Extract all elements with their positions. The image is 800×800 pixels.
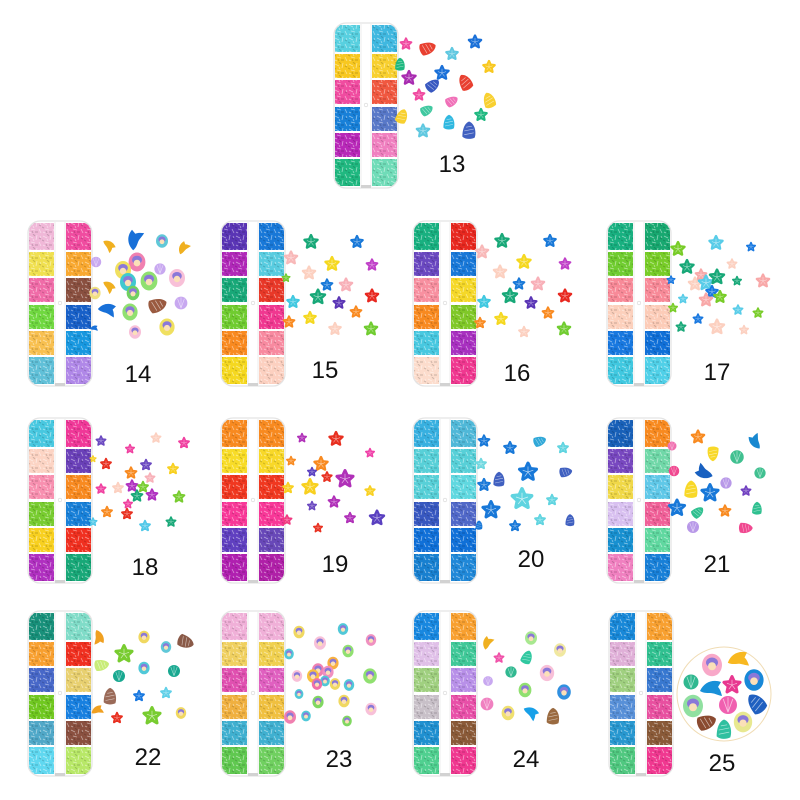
number label: 22 — [135, 744, 161, 771]
tray of twelve colour compartments — [333, 22, 399, 189]
panel: set 19 — [220, 417, 384, 584]
tray of twelve colour compartments — [608, 610, 674, 777]
number label: 20 — [518, 546, 544, 573]
tray of twelve colour compartments — [220, 417, 286, 584]
scattered pieces — [282, 432, 384, 532]
number label: 15 — [312, 357, 338, 384]
scattered pieces — [89, 229, 191, 339]
panel: set 14 — [27, 220, 191, 388]
tray of twelve colour compartments — [412, 417, 478, 584]
scattered pieces — [475, 234, 571, 336]
tray of twelve colour compartments — [220, 610, 286, 777]
panel: set 20 — [412, 417, 574, 584]
circular inset of close-up pieces — [677, 647, 771, 741]
panel: set 22 — [27, 610, 196, 777]
panel: set 23 — [220, 610, 377, 777]
scattered pieces — [668, 431, 766, 533]
panel: set 13 — [333, 22, 497, 189]
number label: 14 — [125, 361, 151, 388]
number label: 13 — [439, 151, 465, 178]
panel: set 24 — [412, 610, 571, 777]
scattered pieces — [394, 36, 497, 139]
panel: set 16 — [412, 220, 571, 387]
tray of twelve colour compartments — [27, 610, 93, 777]
panel: set 15 — [220, 220, 378, 387]
number label: 23 — [326, 746, 352, 773]
scattered pieces — [282, 235, 378, 334]
scattered pieces — [480, 631, 571, 724]
scattered pieces — [89, 433, 189, 530]
number label: 17 — [704, 359, 730, 386]
tray of twelve colour compartments — [412, 220, 478, 387]
number label: 19 — [322, 551, 348, 578]
scattered pieces — [667, 236, 769, 334]
tray of twelve colour compartments — [412, 610, 478, 777]
panel: set 17 — [606, 220, 769, 387]
panel: set 21 — [606, 417, 766, 584]
scattered pieces — [476, 434, 574, 530]
panel: set 18 — [27, 417, 189, 584]
number label: 16 — [504, 360, 530, 387]
scattered pieces — [284, 623, 377, 726]
number label: 25 — [709, 750, 735, 777]
number label: 24 — [513, 746, 539, 773]
tray of twelve colour compartments — [606, 417, 672, 584]
tray of twelve colour compartments — [606, 220, 672, 387]
tray of twelve colour compartments — [27, 220, 93, 387]
panel: set 25 — [608, 610, 771, 777]
number label: 18 — [132, 554, 158, 581]
number label: 21 — [704, 551, 730, 578]
tray of twelve colour compartments — [220, 220, 286, 387]
tray of twelve colour compartments — [27, 417, 93, 584]
scattered pieces — [90, 629, 196, 723]
